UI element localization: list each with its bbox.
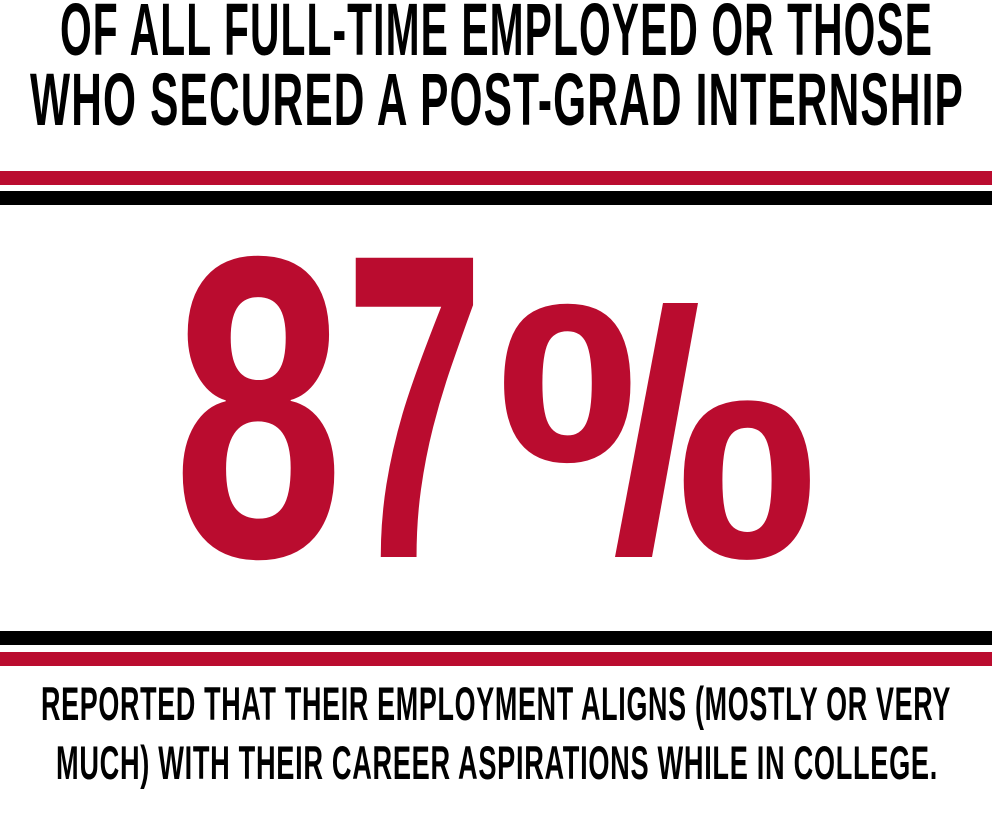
caption bbox=[41, 677, 951, 789]
big statistic: 87%: 7 bbox=[345, 165, 484, 650]
heading bbox=[30, 0, 964, 141]
top double rule bbox=[0, 171, 992, 205]
big statistic: 87%: 8 bbox=[173, 168, 344, 648]
big statistic: 87% bbox=[182, 256, 810, 560]
bottom double rule bbox=[0, 631, 992, 666]
big statistic: 87%: % bbox=[495, 228, 820, 635]
